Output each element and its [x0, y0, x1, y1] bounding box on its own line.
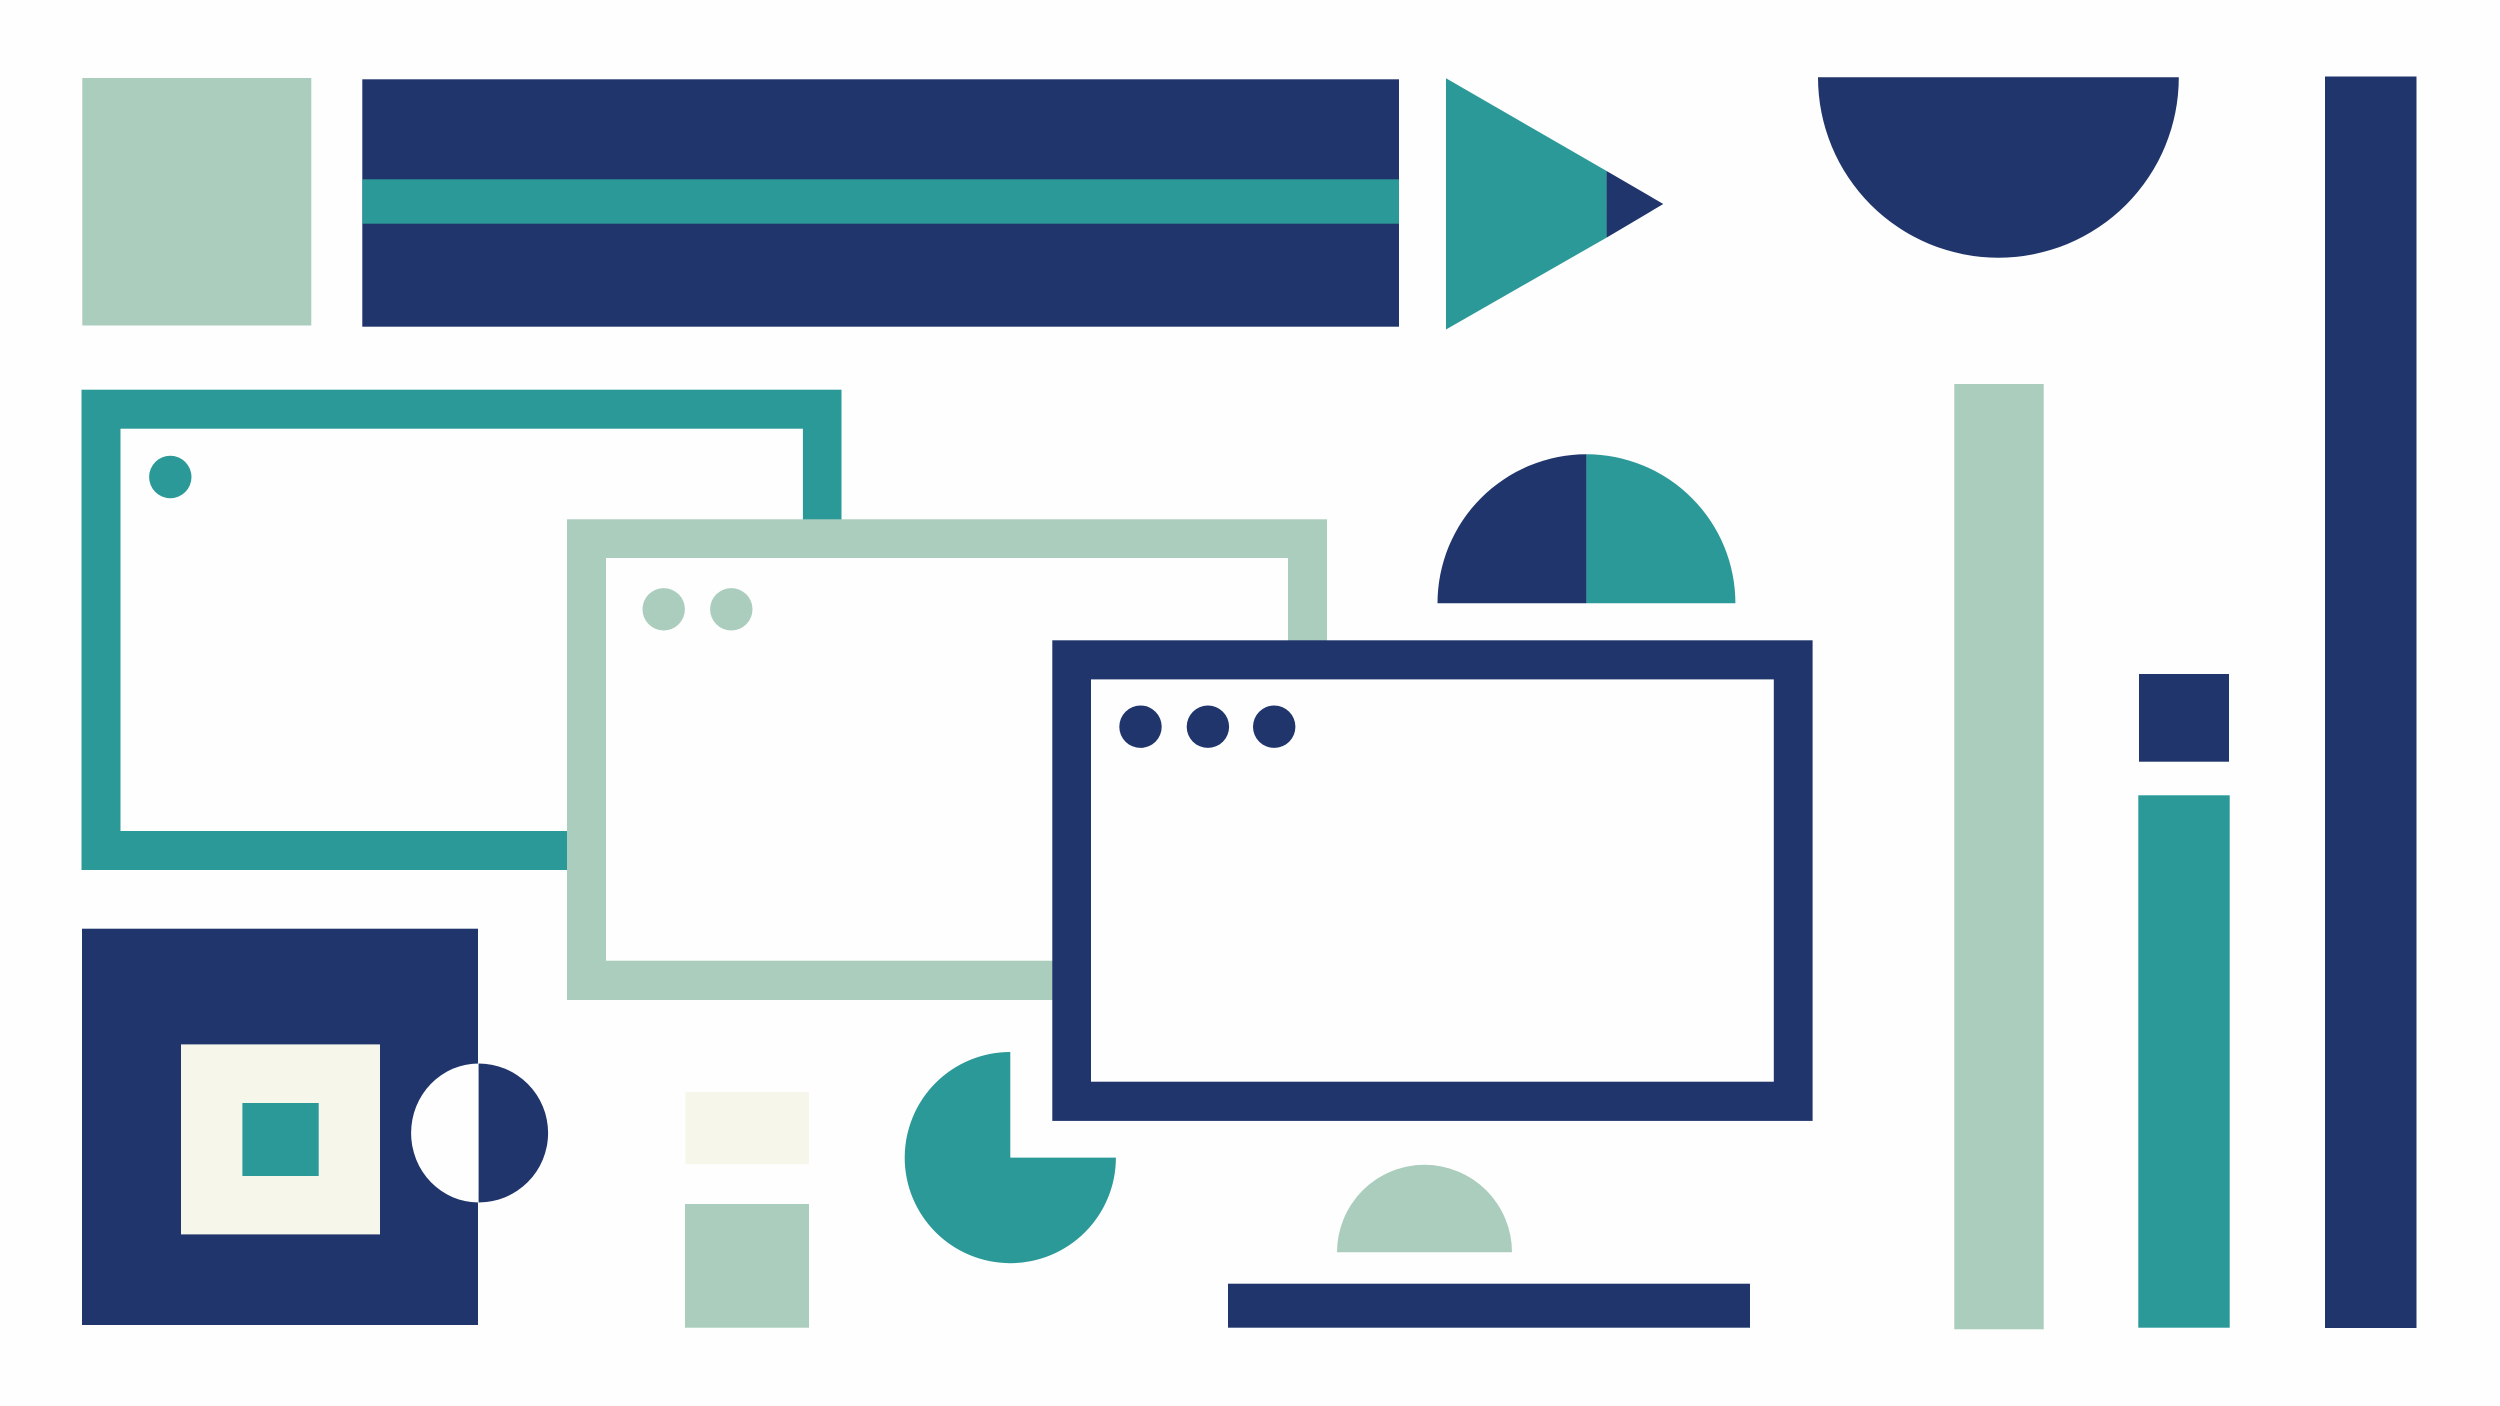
small cream square: [686, 1092, 809, 1164]
nested cream square: [181, 1044, 380, 1234]
small sage dome: [1337, 1165, 1512, 1252]
sage frame inner: [606, 558, 1288, 961]
navy frame inner: [1091, 679, 1774, 1082]
teal window dot: [149, 456, 192, 498]
teal window frame: [82, 390, 842, 870]
banner navy background: [362, 79, 1399, 327]
triangle navy tip: [1607, 171, 1663, 238]
navy frame outer: [1052, 640, 1813, 1121]
triangle teal body: [1446, 78, 1607, 330]
teal pie, three quarters: [905, 1052, 1116, 1263]
nested teal square: [242, 1103, 319, 1176]
navy base bar: [1228, 1284, 1750, 1328]
teal bar, right column: [2138, 795, 2230, 1328]
navy semicircle, top: [1818, 77, 2179, 258]
two-tone dome: [1438, 454, 1735, 603]
banner teal stripe: [362, 179, 1399, 224]
tall navy bar: [2325, 76, 2416, 1328]
striped banner: [362, 79, 1399, 327]
arrow triangle: [1446, 78, 1663, 330]
nested squares: [82, 929, 478, 1325]
sage frame outer: [567, 519, 1327, 1000]
sage window frame: [567, 519, 1327, 1000]
navy window dots: [1119, 706, 1295, 748]
tall sage bar: [1954, 384, 2044, 1329]
circle navy half: [479, 1064, 548, 1202]
navy window frame: [1052, 640, 1813, 1121]
split circle: [411, 1064, 548, 1202]
sage window dots: [642, 588, 752, 630]
dome navy half: [1438, 454, 1586, 603]
small navy square, right column: [2139, 674, 2229, 762]
nested navy square: [82, 929, 478, 1325]
teal frame inner: [120, 429, 803, 831]
dome teal half: [1586, 454, 1735, 603]
sage square, top left: [82, 78, 311, 326]
circle white half: [411, 1064, 479, 1202]
teal frame outer: [82, 390, 842, 870]
small sage square: [685, 1204, 809, 1328]
